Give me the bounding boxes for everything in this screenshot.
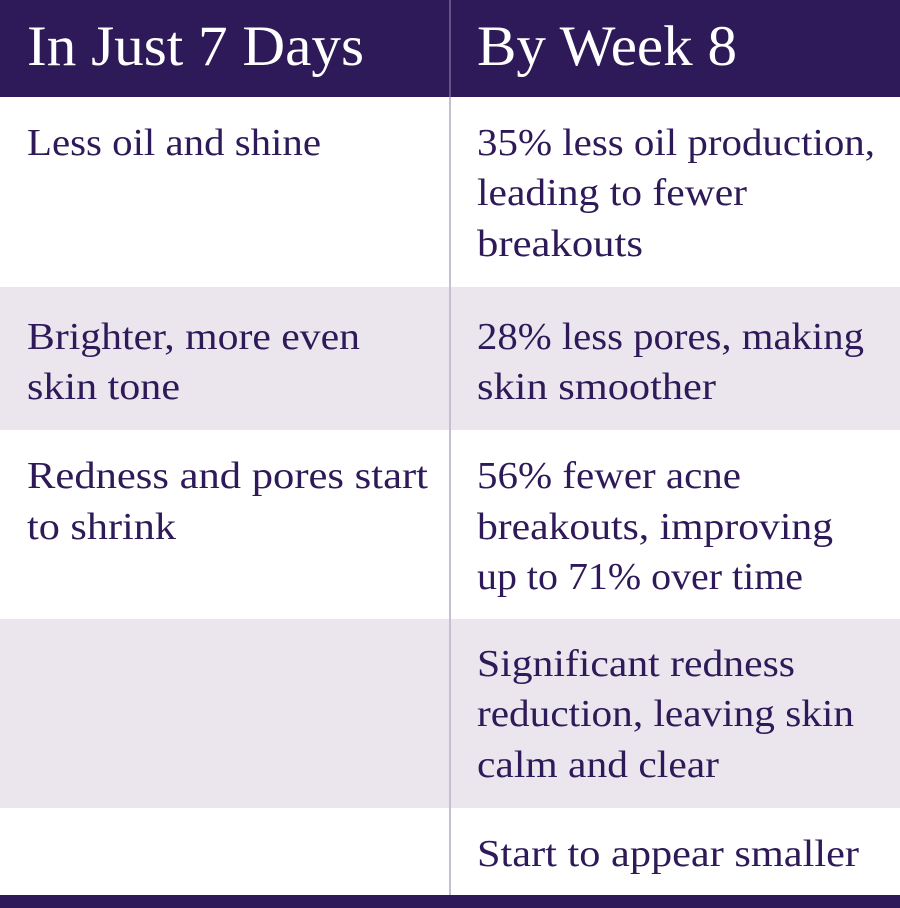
row 4 right text: reduction, leaving skin	[477, 693, 854, 735]
row 2 left text	[27, 316, 360, 408]
row 3 right text: breakouts, improving	[477, 506, 833, 548]
heading: In Just 7 Days: In Just 7 Days	[27, 15, 364, 78]
column divider in body	[449, 97, 451, 895]
row 3 left text	[27, 455, 428, 548]
row 2 right text	[477, 316, 864, 408]
row 1 right text	[477, 122, 875, 265]
row 2 right text: skin smoother	[477, 366, 716, 408]
row 2 left text: skin tone	[27, 366, 180, 408]
row 4 right text: Significant redness	[477, 643, 795, 685]
row 3 left text: Redness and pores start	[27, 455, 428, 497]
row 2 right text: 28% less pores, making	[477, 316, 864, 358]
row 1 left text: Less oil and shine	[27, 122, 321, 164]
row 5 right text: Start to appear smaller	[477, 833, 859, 875]
row 1 right text: 35% less oil production,	[477, 122, 875, 164]
row 3 left text: to shrink	[27, 506, 176, 548]
heading: By Week 8: By Week 8	[477, 15, 737, 78]
footer band	[0, 895, 900, 908]
column divider in header	[449, 0, 451, 97]
row 3 right text	[477, 455, 833, 598]
header band	[0, 0, 900, 97]
row 1 right text: leading to fewer	[477, 172, 747, 214]
row 3 right text: 56% fewer acne	[477, 455, 741, 497]
row 2 left text: Brighter, more even	[27, 316, 360, 358]
row 2 background	[0, 287, 900, 430]
row 4 background	[0, 619, 900, 808]
row 4 right text: calm and clear	[477, 744, 719, 786]
row 1 right text: breakouts	[477, 223, 643, 265]
row 3 right text: up to 71% over time	[477, 556, 803, 598]
row 4 right text	[477, 643, 854, 786]
